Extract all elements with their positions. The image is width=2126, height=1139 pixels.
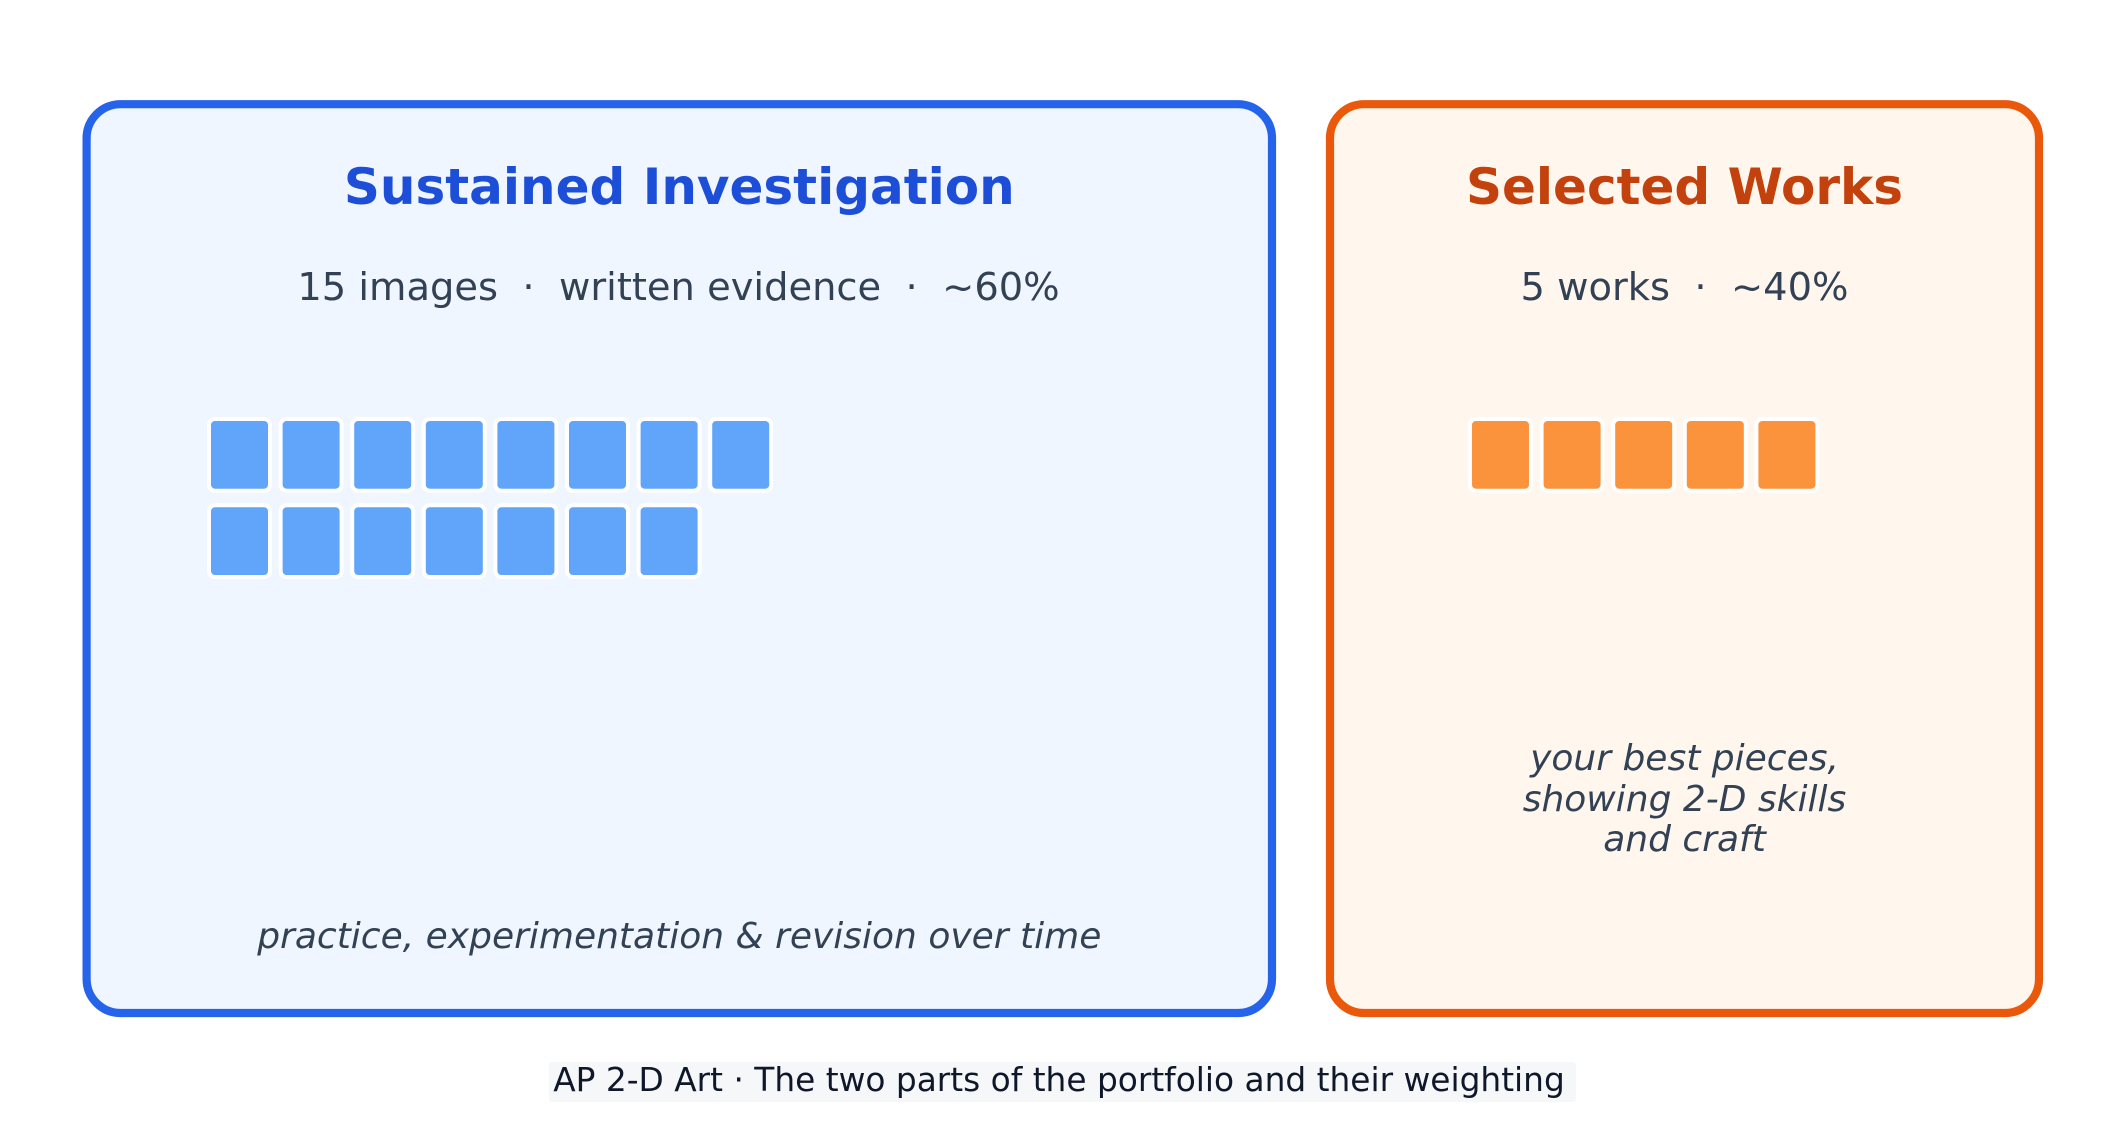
heading: Selected Works: Selected Works [1466, 158, 1903, 216]
note: practice over time: practice, experimentation & revision over time [256, 916, 1101, 957]
note: your best pieces: your best pieces, [1529, 738, 1839, 779]
heading: Sustained Investigation: Sustained Investigation [344, 158, 1015, 216]
panel: Sustained Investigation [87, 104, 1272, 1013]
note: your best pieces: showing 2-D skills [1523, 779, 1846, 820]
image tiles: 15 images [209, 419, 771, 577]
caption [549, 1061, 1576, 1102]
work tiles: 5 works [1470, 419, 1817, 491]
panel frame: orange [1330, 104, 2039, 1013]
note: your best pieces [1523, 738, 1846, 860]
subheading: images, evidence, weight: 15 images · written evidence · ~60% [297, 265, 1060, 310]
subheading: works, weight: 5 works · ~40% [1520, 265, 1849, 310]
note: your best pieces: and craft [1603, 819, 1768, 860]
panel frame: blue [87, 104, 1272, 1013]
caption background [549, 1062, 1576, 1102]
caption text: AP 2-D Art · The two parts of the portfolio and their weighting [553, 1061, 1565, 1099]
panel: Selected Works [1330, 104, 2039, 1013]
